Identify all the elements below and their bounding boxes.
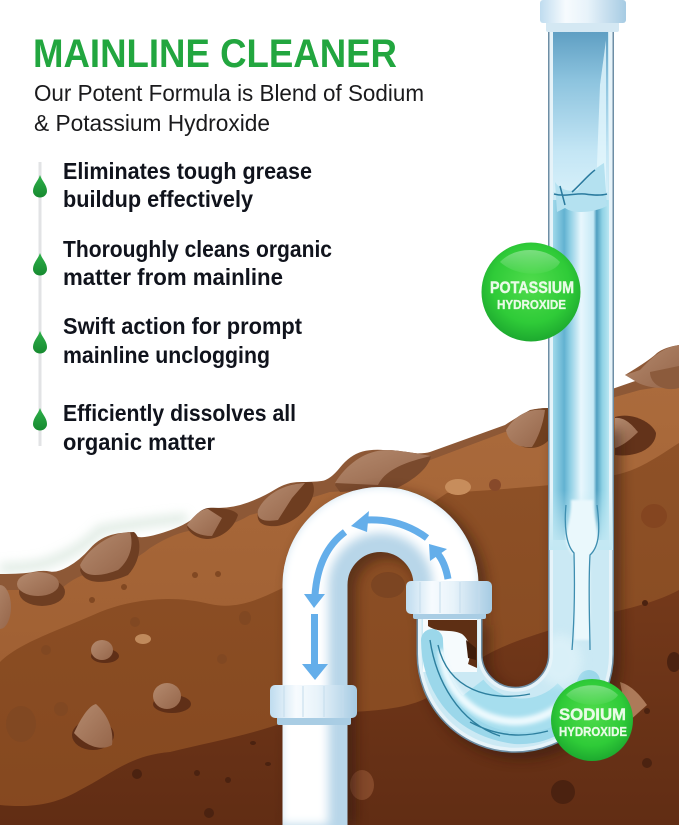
bullet 1: buildup effectively <box>63 186 253 212</box>
subtitle <box>34 80 424 136</box>
badge: potassium hydroxide <box>482 242 580 342</box>
bullet list <box>33 158 332 455</box>
residue clog in trap <box>423 618 477 672</box>
bullet 3: mainline unclogging <box>63 342 270 368</box>
pipe fitting: top <box>540 0 626 32</box>
bullet 1 <box>33 158 312 212</box>
white drain pipe with arch <box>304 509 456 825</box>
badge: sodium hydroxide <box>551 679 633 761</box>
rushing water in trap <box>430 634 589 736</box>
bullet timeline line <box>38 162 42 446</box>
bullet 4: organic matter <box>63 429 215 455</box>
soil stones <box>0 345 679 818</box>
arrow: rising from collar <box>429 544 448 579</box>
arrow: over the arch <box>351 511 427 538</box>
subtitle: & Potassium Hydroxide <box>34 110 270 136</box>
subtitle: Our Potent Formula is Blend of Sodium <box>34 80 424 106</box>
badge: potassium hydroxide: POTASSIUM <box>490 279 574 297</box>
pipe collar: lower left <box>270 685 357 725</box>
badge: sodium hydroxide: HYDROXIDE <box>559 725 627 739</box>
bullet 2: matter from mainline <box>63 264 283 290</box>
water column in vertical pipe <box>549 32 613 650</box>
bullet 1: Eliminates tough grease <box>63 158 312 184</box>
arrow: down the arch <box>304 532 345 608</box>
title: MAINLINE CLEANER <box>33 32 397 76</box>
soil ground cross-section <box>0 345 679 825</box>
badge: potassium hydroxide: HYDROXIDE <box>497 298 566 312</box>
bullet 4: Efficiently dissolves all <box>63 400 296 426</box>
bullet 2: Thoroughly cleans organic <box>63 236 332 262</box>
arrow: straight down <box>302 614 328 680</box>
bullet 3: Swift action for prompt <box>63 313 302 339</box>
pipe collar: upper trap <box>406 581 492 619</box>
clear glass J-trap pipe <box>423 32 613 736</box>
badge: sodium hydroxide: SODIUM <box>559 705 626 724</box>
bullet 3 <box>33 313 302 368</box>
bullet 4 <box>33 400 296 455</box>
bullet 2 <box>33 236 332 290</box>
drain pipe shadows <box>322 430 587 825</box>
flow arrows <box>302 511 448 680</box>
